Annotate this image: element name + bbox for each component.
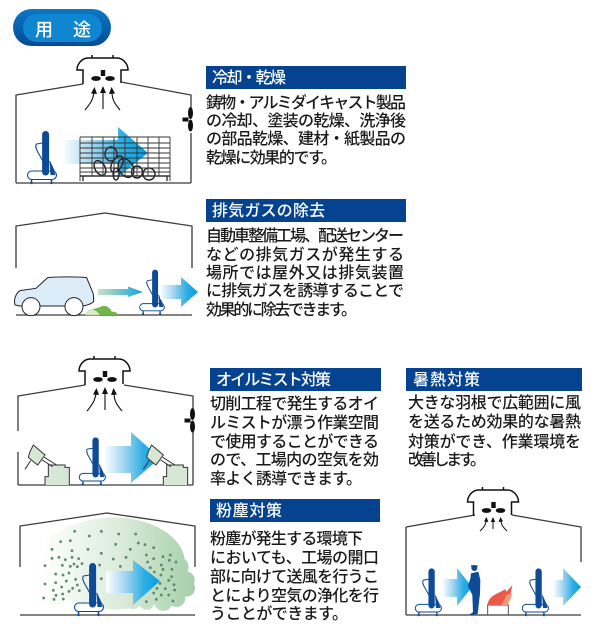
small airflow arrow <box>98 286 143 297</box>
panel: exhaust gas illustration <box>15 213 198 316</box>
heading pill: 用途 <box>13 9 111 46</box>
header: 粉塵対策 <box>210 499 380 522</box>
mobile fan <box>79 437 105 485</box>
text: 排気ガスの除去 description: 効果的に除去できます。 <box>206 301 357 319</box>
header: 冷却・乾燥: 冷却・乾燥 <box>212 69 286 87</box>
mobile fan <box>74 563 104 616</box>
wall fan <box>182 107 193 132</box>
right machine <box>143 445 188 485</box>
text: オイルミスト対策 description: で使用することができる <box>210 432 379 451</box>
large airflow arrow <box>160 277 198 307</box>
airflow arrow <box>104 432 160 483</box>
wall fan <box>184 408 195 432</box>
building outline <box>406 515 581 615</box>
right airflow arrow <box>553 568 581 606</box>
exhaust cloud <box>85 306 119 315</box>
header: 冷却・乾燥 <box>206 66 406 89</box>
text: 粉塵対策 description: 部に向けて送風を行うこ <box>210 568 379 586</box>
panel: dust illustration <box>20 513 195 616</box>
dust cloud <box>37 517 195 611</box>
header: オイルミスト対策: オイルミスト対策 <box>216 371 331 389</box>
text: 排気ガスの除去 description: 場所では屋外又は排気装置 <box>206 264 404 282</box>
text: 冷却・乾燥 description: 乾燥に効果的です。 <box>206 149 337 167</box>
roof ventilator <box>77 55 128 110</box>
header: 暑熱対策: 暑熱対策 <box>413 371 480 389</box>
text: 暑熱対策 description: 改善します。 <box>408 451 486 469</box>
panel: cooling and drying illustration <box>16 55 193 184</box>
fire <box>487 585 512 615</box>
mobile fan <box>28 131 56 184</box>
airflow arrow <box>106 560 160 605</box>
building outline <box>18 385 193 485</box>
building outline <box>16 213 192 315</box>
text: 暑熱対策 description: 大きな羽根で広範囲に風 <box>408 394 581 412</box>
left airflow arrow <box>442 568 472 606</box>
roof ventilator <box>468 487 518 531</box>
text: オイルミスト対策 description: 率よく誘導できます。 <box>210 470 362 488</box>
roof ventilator <box>79 356 130 411</box>
mobile fan <box>140 270 164 315</box>
text: 粉塵対策 description: うことができます。 <box>210 604 348 623</box>
text: オイルミスト対策 description: ルミストが漂う作業空間 <box>210 413 379 432</box>
text: 排気ガスの除去 description: などの排気ガスが発生する <box>206 245 404 264</box>
header: オイルミスト対策 <box>210 368 381 391</box>
panel: heat countermeasure illustration <box>406 487 581 616</box>
text: 暑熱対策 description: 対策ができ、作業環境を <box>408 432 581 451</box>
panel: oil mist illustration <box>18 356 195 485</box>
text: 冷却・乾燥 description: の冷却、塗装の乾燥、洗浄後 <box>206 112 406 130</box>
airflow arrow <box>62 127 148 177</box>
header: 排気ガスの除去 <box>206 199 406 222</box>
text: 粉塵対策 description: においても、工場の開口 <box>210 549 379 567</box>
header: 暑熱対策 <box>406 368 582 391</box>
building outline <box>16 82 191 183</box>
header: 粉塵対策: 粉塵対策 <box>216 502 282 520</box>
text: 粉塵対策 description: 粉塵が発生する環境下 <box>210 529 363 548</box>
stacked parts in basket <box>80 137 170 181</box>
car <box>15 277 94 316</box>
text: オイルミスト対策 description: ので、工場内の空気を効 <box>210 451 379 469</box>
text: 排気ガスの除去 description: 自動車整備工場、配送センター <box>206 227 404 245</box>
heading pill: 用途: 用 途 <box>35 20 91 40</box>
text: 粉塵対策 description: とにより空気の浄化を行 <box>210 587 379 605</box>
text: 暑熱対策 description: を送るため効果的な暑熱 <box>408 413 581 431</box>
left mobile fan <box>415 568 441 616</box>
text: オイルミスト対策 description: 切削工程で発生するオイ <box>210 395 379 413</box>
right mobile fan <box>522 568 548 616</box>
text: 冷却・乾燥 description: の部品乾燥、建材・紙製品の <box>206 130 406 148</box>
building outline <box>20 513 195 615</box>
left machine <box>25 445 69 485</box>
header: 排気ガスの除去: 排気ガスの除去 <box>212 202 325 220</box>
text: 排気ガスの除去 description: に排気ガスを誘導することで <box>206 282 404 300</box>
text: 冷却・乾燥 description: 鋳物・アルミダイキャスト製品 <box>206 93 406 112</box>
worker <box>468 565 480 615</box>
